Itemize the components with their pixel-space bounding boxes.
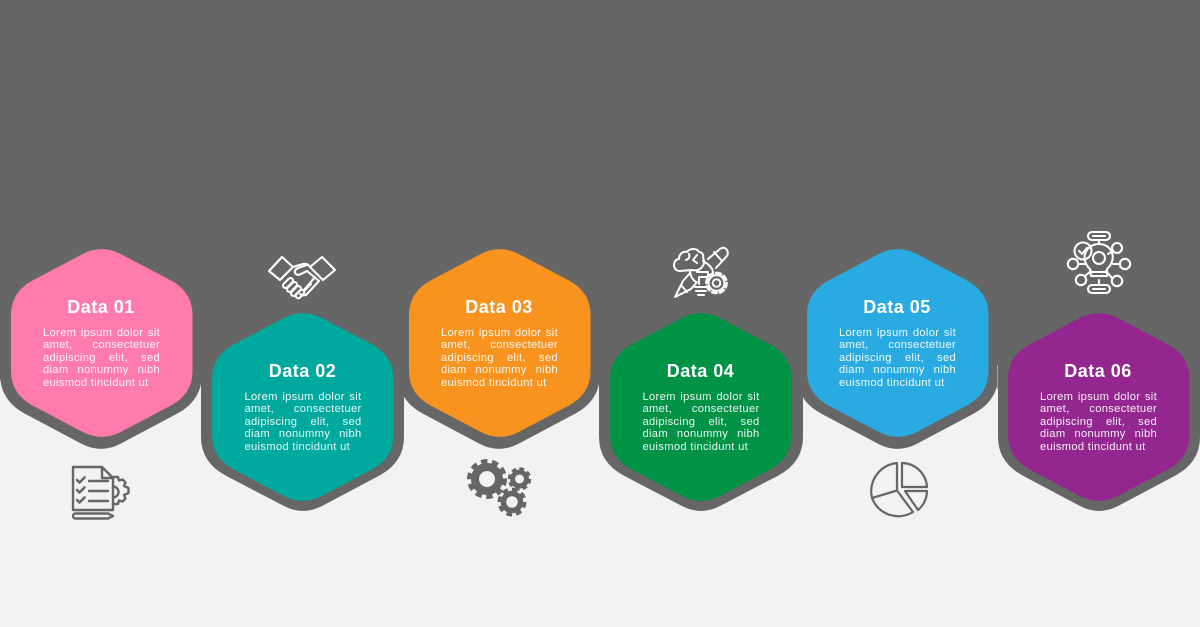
text block: Data 02 description: diam nonummy nibh: [244, 428, 362, 440]
text block: Data 03 description: Lorem ipsum dolor sit: [441, 326, 558, 338]
text block: Data 03 description: amet, consectetuer: [441, 339, 558, 351]
icon: idea network with bulb: [1066, 231, 1132, 294]
text block: Data 03 description: diam nonummy nibh: [441, 364, 558, 376]
text block: Data 04 description: diam nonummy nibh: [642, 428, 760, 440]
text block: Data 05 description: Lorem ipsum dolor sit: [839, 326, 956, 338]
text block: Data 06 description: diam nonummy nibh: [1040, 428, 1157, 440]
heading: Data 05: Data 05: [863, 296, 931, 316]
text block: Data 04 description: euismod tincidunt ut: [642, 441, 748, 453]
icon: pie chart: [870, 462, 928, 518]
text block: Data 06 description: adipiscing elit, sed: [1040, 416, 1157, 428]
heading: Data 04: Data 04: [667, 360, 734, 380]
text block: Data 06 description: amet, consectetuer: [1040, 403, 1157, 415]
text block: Data 06 description: Lorem ipsum dolor sit: [1040, 390, 1157, 402]
icon: brain, pencil, bulb and gear: [673, 246, 729, 298]
icon: three gears: [467, 459, 532, 516]
text block: Data 05 description: euismod tincidunt ut: [839, 377, 945, 389]
text block: Data 01 description: Lorem ipsum dolor sit: [43, 326, 160, 338]
panel: Data 05: [807, 249, 988, 437]
text block: Data 01 description: diam nonummy nibh: [43, 364, 160, 376]
panel: Data 03: [409, 249, 590, 437]
text block: Data 02 description: [244, 390, 362, 453]
panel: Data 01: [11, 249, 192, 437]
icon: handshake: [268, 256, 336, 300]
text block: Data 02 description: Lorem ipsum dolor sit: [244, 390, 362, 402]
text block: Data 03 description: [441, 326, 558, 389]
heading: Data 02: Data 02: [269, 360, 336, 380]
text block: Data 03 description: euismod tincidunt ut: [441, 377, 547, 389]
text block: Data 02 description: amet, consectetuer: [244, 403, 362, 415]
text block: Data 02 description: euismod tincidunt ut: [244, 441, 350, 453]
text block: Data 04 description: adipiscing elit, sed: [642, 416, 760, 428]
heading: Data 06: Data 06: [1064, 360, 1132, 380]
text block: Data 04 description: [642, 390, 760, 453]
text block: Data 01 description: adipiscing elit, sed: [43, 352, 160, 364]
text block: Data 06 description: euismod tincidunt ut: [1040, 441, 1146, 453]
text block: Data 01 description: euismod tincidunt ut: [43, 377, 149, 389]
text block: Data 03 description: adipiscing elit, sed: [441, 352, 558, 364]
text block: Data 04 description: Lorem ipsum dolor sit: [642, 390, 760, 402]
text block: Data 01 description: [43, 326, 160, 389]
text block: Data 05 description: [839, 326, 956, 389]
panel: Data 04: [610, 313, 792, 501]
text block: Data 05 description: diam nonummy nibh: [839, 364, 956, 376]
panel: Data 06: [1008, 313, 1190, 501]
text block: Data 05 description: amet, consectetuer: [839, 339, 956, 351]
text block: Data 02 description: adipiscing elit, sed: [244, 416, 362, 428]
text block: Data 01 description: amet, consectetuer: [43, 339, 160, 351]
text block: Data 06 description: [1040, 390, 1157, 453]
heading: Data 01: Data 01: [67, 296, 135, 316]
icon: checklist with gear: [72, 466, 130, 520]
heading: Data 03: Data 03: [465, 296, 533, 316]
text block: Data 05 description: adipiscing elit, sed: [839, 352, 956, 364]
text block: Data 04 description: amet, consectetuer: [642, 403, 760, 415]
panel: Data 02: [212, 313, 394, 501]
